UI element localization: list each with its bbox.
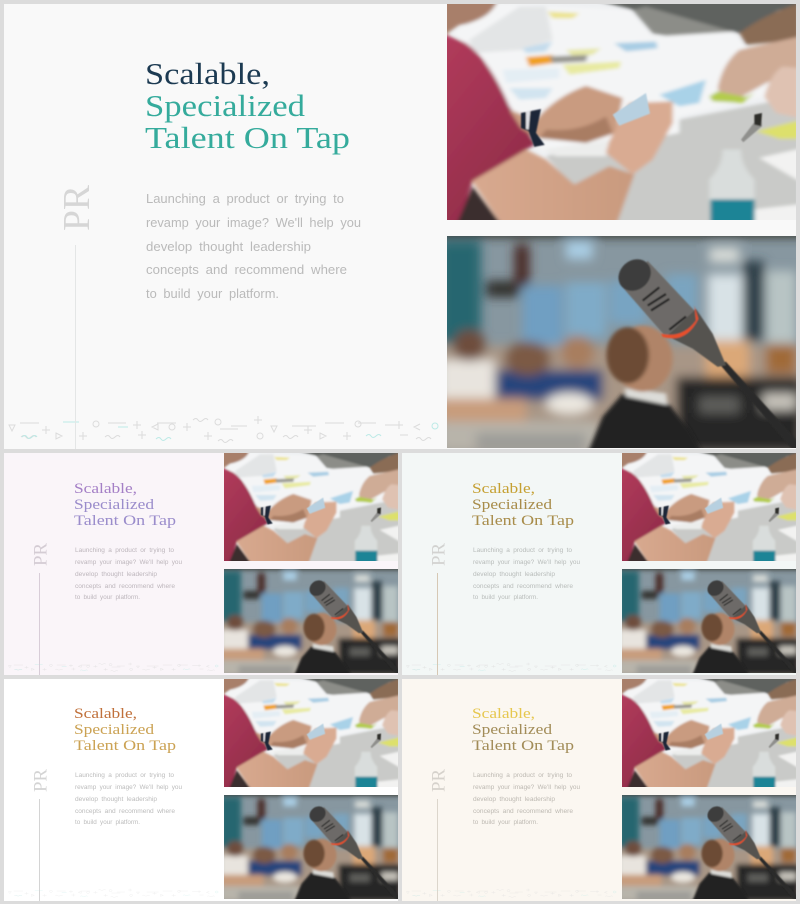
body text: develop thought leadership (146, 240, 311, 254)
vertical rule with PR label: PR (428, 543, 450, 566)
title: Specialized (145, 89, 305, 123)
body text: Launching a product or trying to (146, 192, 344, 206)
body text: revamp your image? We'll help you (75, 559, 183, 566)
title (74, 480, 176, 529)
decorative icon strip (9, 416, 438, 442)
decorative icon strip (8, 889, 218, 898)
body text: Launching a product or trying to (75, 547, 175, 554)
title: Scalable, (74, 480, 137, 497)
title: Specialized (74, 496, 154, 513)
vertical rule with PR label: PR (30, 769, 52, 792)
vertical rule with PR label (30, 769, 52, 901)
body text: concepts and recommend where (473, 808, 574, 815)
body text (146, 192, 361, 301)
panel: main slide (4, 0, 800, 463)
body text: develop thought leadership (473, 571, 556, 578)
photo: team workshop (217, 670, 406, 795)
panel: yellow on cream variant (402, 670, 800, 904)
title (472, 480, 574, 529)
title: Talent On Tap (74, 737, 176, 754)
photo: team workshop (615, 670, 800, 795)
body text: revamp your image? We'll help you (473, 559, 581, 566)
decorative icon strip (8, 663, 218, 672)
title: Scalable, (472, 480, 535, 497)
body text: revamp your image? We'll help you (473, 784, 581, 791)
body text: concepts and recommend where (75, 808, 176, 815)
vertical rule with PR label: PR (428, 769, 450, 792)
vertical rule with PR label: PR (56, 184, 98, 231)
body text: to build your platform. (75, 819, 140, 826)
vertical rule with PR label (428, 543, 450, 675)
panel: purple variant (4, 444, 406, 680)
title: Specialized (472, 721, 552, 738)
title (74, 705, 176, 754)
title (145, 57, 350, 155)
title: Talent On Tap (472, 512, 574, 529)
panel: orange on white variant (4, 670, 406, 904)
title: Talent On Tap (74, 512, 176, 529)
body text: revamp your image? We'll help you (75, 784, 183, 791)
body text: Launching a product or trying to (75, 772, 175, 779)
photo: conference microphone (217, 786, 406, 904)
panel: gold on mint variant (402, 444, 800, 680)
decorative icon strip (406, 663, 616, 672)
body text: revamp your image? We'll help you (146, 216, 361, 230)
photo: conference microphone (615, 786, 800, 904)
vertical rule with PR label: PR (30, 543, 52, 566)
vertical rule with PR label (428, 769, 450, 901)
title: Talent On Tap (145, 121, 350, 155)
body text: concepts and recommend where (75, 583, 176, 590)
body text: concepts and recommend where (146, 263, 347, 277)
title: Specialized (74, 721, 154, 738)
photo: team workshop (615, 444, 800, 569)
body text (75, 772, 183, 826)
vertical rule with PR label (30, 543, 52, 675)
title: Scalable, (472, 705, 535, 722)
title: Specialized (472, 496, 552, 513)
title: Scalable, (74, 705, 137, 722)
body text (473, 772, 581, 826)
title: Talent On Tap (472, 737, 574, 754)
body text: develop thought leadership (75, 571, 158, 578)
body text: Launching a product or trying to (473, 772, 573, 779)
title (472, 705, 574, 754)
photo: conference microphone (615, 560, 800, 680)
decorative icon strip (406, 889, 616, 898)
photo: team workshop (217, 444, 406, 569)
body text: to build your platform. (75, 594, 140, 601)
title: Scalable, (145, 57, 270, 91)
body text: to build your platform. (473, 819, 538, 826)
body text (75, 547, 183, 601)
photo: team workshop (433, 0, 800, 236)
body text: develop thought leadership (75, 796, 158, 803)
body text (473, 547, 581, 601)
photo: conference microphone (217, 560, 406, 680)
photo: conference microphone (433, 218, 800, 463)
body text: concepts and recommend where (473, 583, 574, 590)
body text: to build your platform. (473, 594, 538, 601)
body text: Launching a product or trying to (473, 547, 573, 554)
body text: to build your platform. (146, 287, 279, 301)
body text: develop thought leadership (473, 796, 556, 803)
